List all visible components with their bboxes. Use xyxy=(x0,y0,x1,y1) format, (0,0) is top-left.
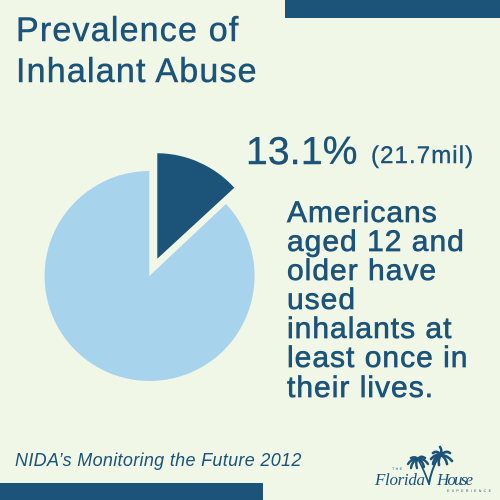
source: NIDA’s Monitoring the Future 2012 xyxy=(15,450,302,470)
title xyxy=(16,11,258,90)
title: Prevalence of xyxy=(16,11,240,49)
statistic: (21.7mil) xyxy=(371,142,474,169)
statistic: 13.1% xyxy=(246,130,358,173)
description: older have xyxy=(287,254,437,287)
description: their lives. xyxy=(287,371,434,404)
logo text: EXPERIENCE xyxy=(447,489,492,493)
pie slice: 13.1% xyxy=(157,153,234,259)
logo text: THE xyxy=(392,467,403,471)
top decorative bar xyxy=(285,0,500,18)
logo: The Florida House Experience xyxy=(374,446,492,493)
bottom decorative bar xyxy=(0,483,263,500)
title: Inhalant Abuse xyxy=(16,52,258,90)
description: least once in xyxy=(287,341,468,374)
pie slice: remaining share xyxy=(45,171,255,381)
description: Americans xyxy=(287,196,438,229)
logo text: Florida xyxy=(374,470,425,489)
description xyxy=(286,196,468,404)
logo text xyxy=(374,467,492,493)
icon: palm trees xyxy=(408,447,452,484)
description: inhalants at xyxy=(287,312,452,345)
logo text: House xyxy=(436,470,473,489)
statistic xyxy=(246,130,474,173)
description: used xyxy=(287,283,356,316)
description: aged 12 and xyxy=(287,225,465,258)
